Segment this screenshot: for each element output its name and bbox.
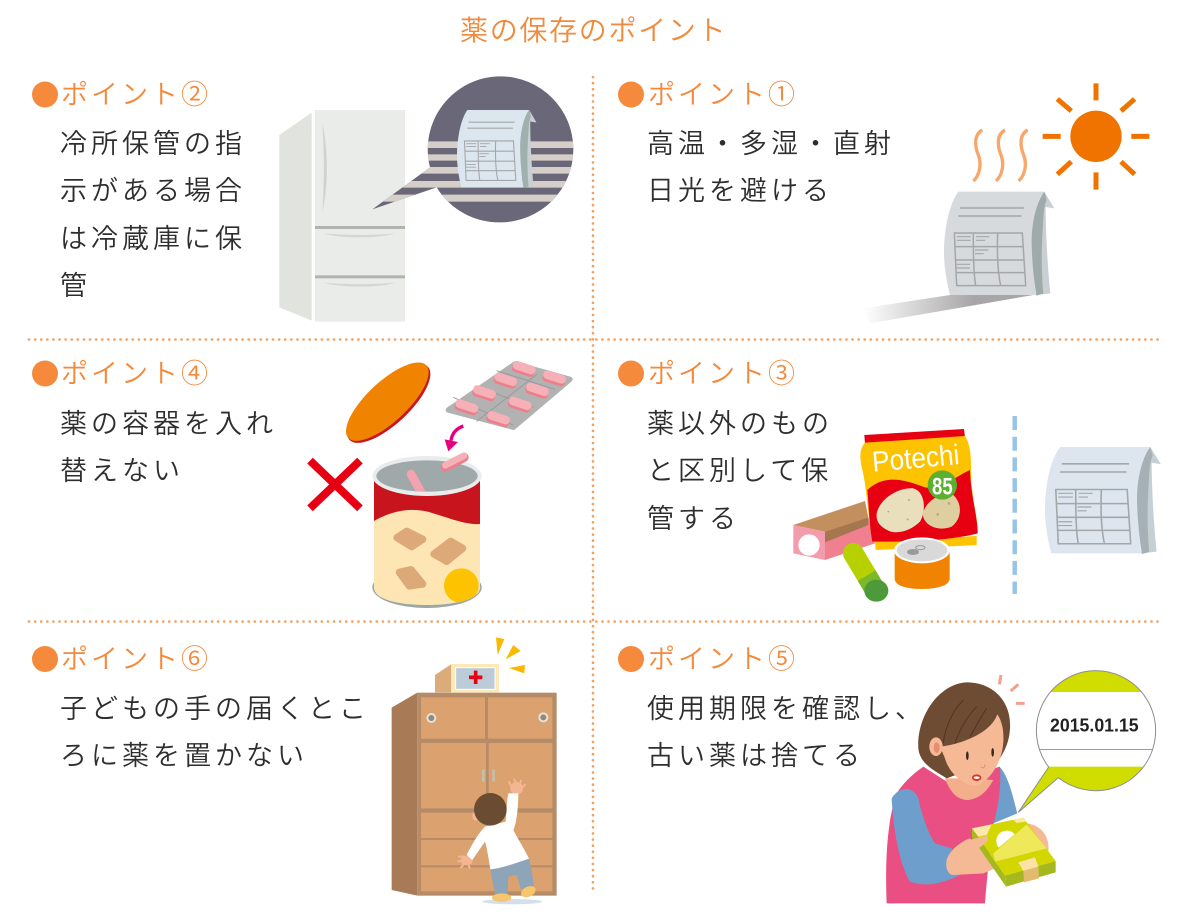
heading: point 1: ポイント① — [648, 80, 798, 110]
icon: pills and snack can with cross — [310, 351, 570, 608]
title: 薬の保存のポイント — [460, 15, 727, 46]
heading: point 2: ポイント② — [61, 80, 211, 110]
icon: medicine document — [1045, 447, 1161, 554]
heading: point 6: ポイント⑥ — [61, 644, 211, 674]
text: point 2: 冷所保管の指 — [60, 129, 246, 159]
icon: woman checking expiry date — [886, 665, 1160, 903]
text: point 3: 薬以外のもの — [647, 409, 833, 439]
text: point 2: 管 — [60, 271, 91, 301]
text: point 2: は冷蔵庫に保 — [60, 224, 246, 254]
text: point 6 — [60, 694, 370, 771]
text: point 6: 子どもの手の届くとこ — [60, 694, 370, 724]
heading: point 5: ポイント⑤ — [648, 644, 798, 674]
text: point 2 — [60, 129, 246, 301]
text: point 3 — [647, 409, 833, 534]
panel: point 2 refrigerator — [32, 70, 583, 322]
text: point 2: 示がある場合 — [60, 176, 246, 206]
icon: sun, heat and document — [863, 83, 1149, 323]
heading: point 3: ポイント③ — [648, 359, 798, 389]
panel: point 1 heat and sunlight — [618, 80, 1149, 323]
text: point 3: 管する — [647, 504, 740, 534]
icon: refrigerator with cold medicine — [279, 70, 583, 322]
heading: point 4: ポイント④ — [61, 359, 211, 389]
label: expiry date: 2015.01.15 — [1050, 715, 1139, 736]
panel: point 5 check expiry date — [618, 644, 1160, 903]
panel: point 4 do not transfer containers — [32, 351, 570, 608]
text: point 4 — [60, 409, 277, 486]
text: point 1: 日光を避ける — [647, 176, 833, 206]
text: point 3: と区別して保 — [647, 456, 832, 486]
text: point 1: 高温・多湿・直射 — [647, 129, 895, 159]
text: point 5: 使用期限を確認し、 — [647, 694, 926, 724]
text: point 5 — [647, 694, 926, 771]
icon: snacks — [793, 429, 978, 602]
icon: cabinet, first aid box and child — [392, 637, 557, 904]
panel: point 3 keep separate from other items — [618, 359, 1161, 602]
icon: snacks: 85 — [932, 473, 953, 500]
text: point 6: ろに薬を置かない — [60, 741, 308, 771]
label: Potechi: Potechi — [871, 439, 961, 479]
text: point 4: 薬の容器を入れ — [60, 409, 277, 439]
text: point 4: 替えない — [60, 456, 184, 486]
text: point 1 — [647, 129, 895, 206]
panel: point 6 out of reach of children — [32, 637, 557, 904]
text: point 5: 古い薬は捨てる — [647, 741, 864, 771]
